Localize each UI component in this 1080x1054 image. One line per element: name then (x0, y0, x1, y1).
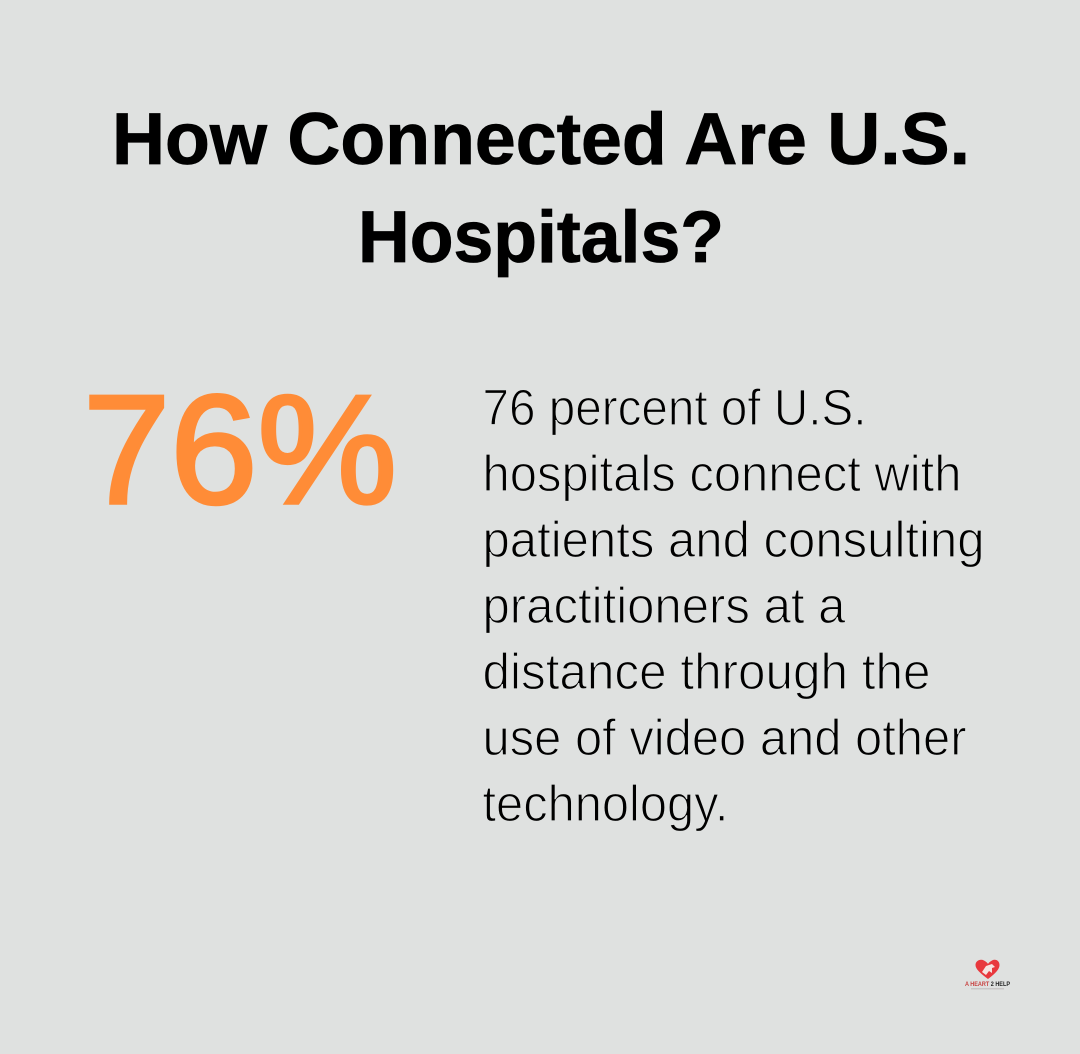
description text: hospitals connect with (482, 445, 962, 502)
description text: use of video and other (482, 709, 967, 766)
logo: A Heart 2 Help (965, 960, 1011, 990)
big stat: 76%: 76% (83, 363, 397, 536)
title: How Connected Are U.S. (112, 99, 970, 180)
title (112, 99, 970, 278)
description text: 76 percent of U.S. (482, 379, 866, 436)
description text: distance through the (482, 643, 930, 700)
title: Hospitals? (358, 197, 724, 278)
description text (482, 379, 984, 832)
description text: patients and consulting (482, 511, 984, 568)
description text: technology. (482, 775, 728, 832)
logo wordmark: A HEART 2 HELP (965, 981, 1011, 988)
logo tagline (971, 988, 1004, 990)
icon: heart with hand (976, 960, 1000, 979)
description text: practitioners at a (482, 577, 846, 634)
